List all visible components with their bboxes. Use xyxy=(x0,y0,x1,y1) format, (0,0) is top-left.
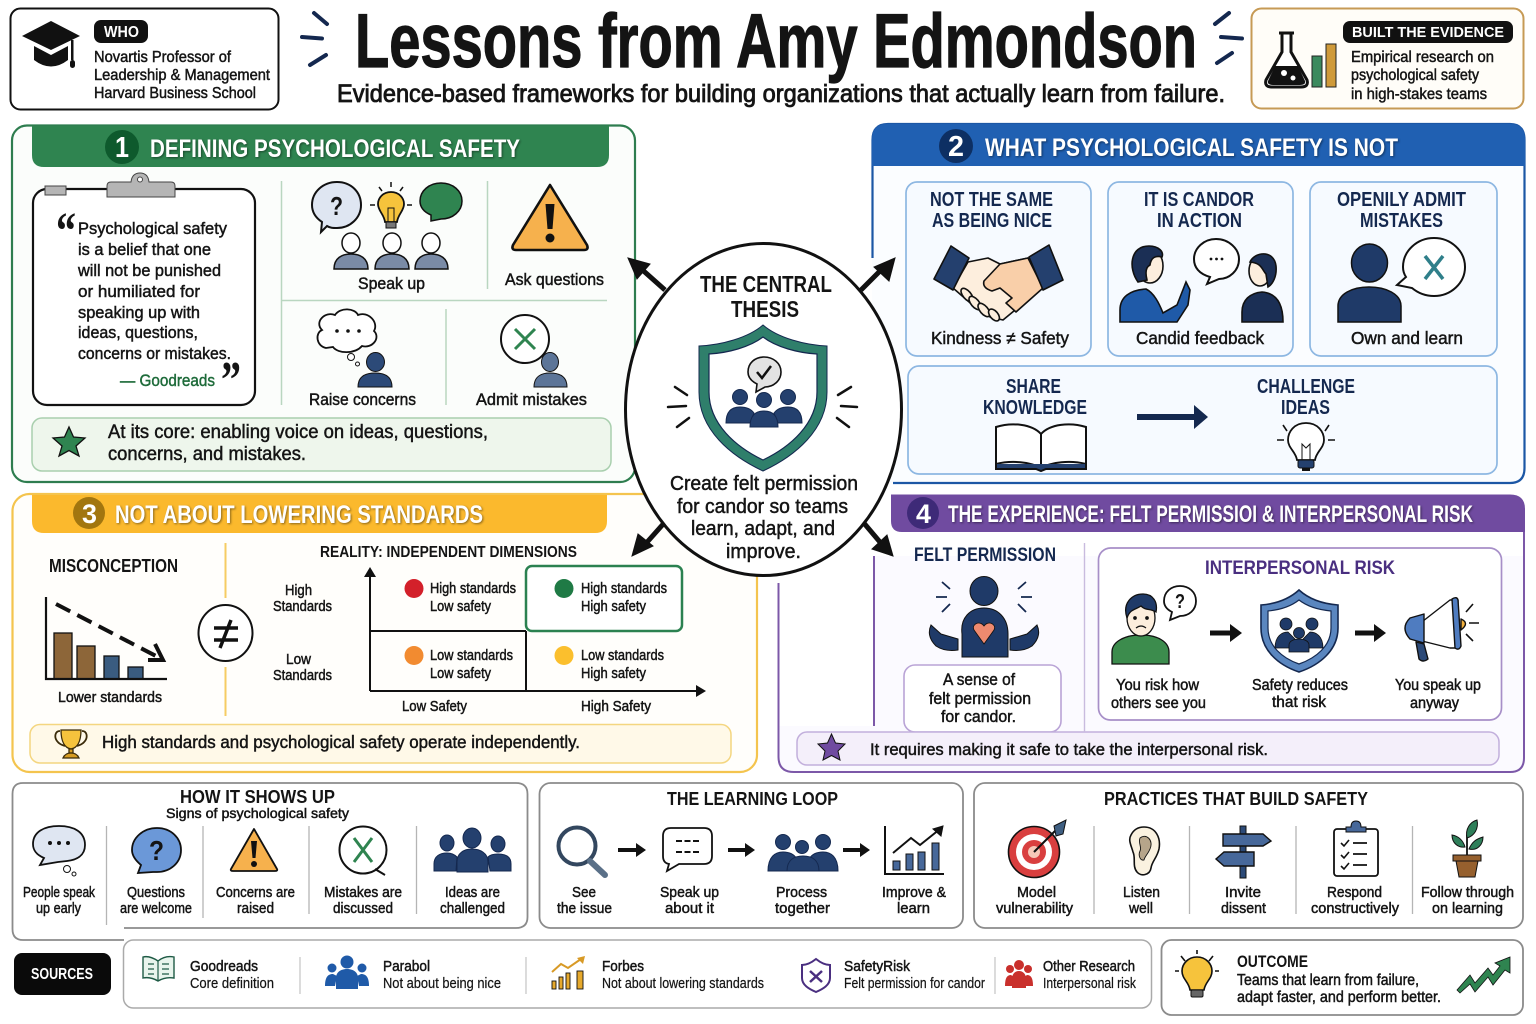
source: goodreads xyxy=(143,957,274,992)
item: model vulnerability: Model xyxy=(1017,884,1056,901)
quote clipboard xyxy=(33,173,255,409)
badge: who xyxy=(94,20,148,43)
item: respond constructively: Respond xyxy=(1327,884,1382,901)
panel 4: the experience xyxy=(778,494,1525,772)
arrow: to panel 3 xyxy=(632,522,665,556)
reality matrix: High safety xyxy=(581,598,646,615)
icon: ask questions xyxy=(505,185,604,289)
central thesis circle: improve. xyxy=(726,541,801,563)
panel: who xyxy=(10,8,278,110)
quote clipboard: speaking up with xyxy=(78,303,200,322)
source: goodreads: Core definition xyxy=(190,976,274,992)
item: mistakes are discussed: Mistakes are xyxy=(324,884,402,901)
interpersonal risk box: anyway xyxy=(1410,695,1459,712)
item: ideas are challenged: Ideas are xyxy=(445,884,500,901)
interpersonal risk box: others see you xyxy=(1111,695,1206,712)
card: it is candor in action: IN ACTION xyxy=(1157,210,1242,232)
item: ideas are challenged xyxy=(434,828,511,917)
card: not the same as being nice: NOT THE SAME xyxy=(930,189,1053,211)
step: improve and learn: learn xyxy=(897,900,930,917)
reality matrix: High Safety xyxy=(581,698,651,715)
item: model vulnerability xyxy=(996,820,1073,917)
step: process together: Process xyxy=(776,884,827,901)
card: not the same as being nice xyxy=(906,182,1091,356)
reality matrix: Low Safety xyxy=(402,698,467,715)
callout: it requires: It requires making it safe to take the interpersonal risk. xyxy=(870,740,1268,759)
box: a sense of felt permission xyxy=(904,665,1061,732)
source: parabol: Not about being nice xyxy=(383,976,501,992)
reality matrix: High xyxy=(285,582,312,599)
item: model vulnerability: vulnerability xyxy=(996,900,1073,917)
panel 1: defining psychological safety xyxy=(12,126,635,482)
icon: admit mistakes xyxy=(476,315,587,409)
item: concerns are raised: Concerns are xyxy=(216,884,295,901)
panel: practices that build safety xyxy=(974,783,1523,928)
item: questions are welcome: are welcome xyxy=(120,900,192,917)
icon: raise concerns xyxy=(309,309,416,409)
icon: graduation cap xyxy=(22,21,80,68)
box: a sense of felt permission: felt permission xyxy=(929,690,1031,708)
subtitle: Evidence-based frameworks for building organizations that actually learn from failure. xyxy=(337,80,1225,108)
not equal sign xyxy=(198,605,252,661)
arrow xyxy=(728,843,755,857)
heading: how it shows up: Signs of psychological safety xyxy=(166,805,349,821)
central thesis circle: THE CENTRAL xyxy=(700,271,832,297)
icon: speak up xyxy=(312,182,462,293)
icon: person with heart xyxy=(929,576,1039,657)
title: Lessons from Amy Edmondson xyxy=(355,0,1197,84)
icon: megaphone xyxy=(1405,598,1479,661)
item: concerns are raised xyxy=(216,829,295,917)
icon: handshake xyxy=(934,245,1063,323)
item: people speak up early xyxy=(23,826,95,917)
heading 2: WHAT PSYCHOLOGICAL SAFETY IS NOT xyxy=(985,134,1398,162)
heading 4 xyxy=(891,494,1525,532)
panel: outcome: Teams that learn from failure, xyxy=(1237,972,1419,989)
quote clipboard: ideas, questions, xyxy=(78,323,198,342)
central thesis circle xyxy=(626,244,902,576)
item: questions are welcome: ? xyxy=(149,835,164,866)
interpersonal risk box: You risk how xyxy=(1116,677,1200,694)
item: listen well xyxy=(1123,827,1160,917)
icon: admit mistakes: Admit mistakes xyxy=(476,390,587,409)
text: evidence details xyxy=(1351,49,1494,103)
source: other research xyxy=(1005,958,1137,992)
card: not the same as being nice: Kindness ≠ Safety xyxy=(931,328,1069,348)
panel: built the evidence xyxy=(1252,8,1524,108)
misconception chart xyxy=(46,556,178,706)
callout: high standards: High standards and psychological safety operate independently. xyxy=(102,732,580,752)
reality matrix xyxy=(273,544,706,715)
felt permission column: FELT PERMISSION xyxy=(914,545,1056,566)
item: people speak up early: up early xyxy=(36,900,81,917)
item: follow through on learning: Follow through xyxy=(1421,884,1514,901)
panel: outcome xyxy=(1162,940,1523,1015)
card: it is candor in action: Candid feedback xyxy=(1136,328,1264,348)
panel: outcome: OUTCOME xyxy=(1237,953,1308,971)
quote clipboard: ” xyxy=(221,352,241,409)
heading 1: DEFINING PSYCHOLOGICAL SAFETY xyxy=(150,135,520,163)
icon: light bulb xyxy=(1277,423,1335,471)
card: openily admit mistakes xyxy=(1310,182,1497,356)
badge: sources xyxy=(14,953,111,995)
interpersonal risk box: INTERPERSONAL RISK xyxy=(1205,557,1395,579)
panel: outcome: adapt faster, and perform better. xyxy=(1237,989,1441,1006)
card: openily admit mistakes: OPENILY ADMIT xyxy=(1337,189,1466,211)
heading 3 xyxy=(32,495,607,533)
source: parabol xyxy=(325,956,501,992)
misconception chart: MISCONCEPTION xyxy=(49,556,178,576)
source: safetyrisk: SafetyRisk xyxy=(844,958,910,975)
icon: person with x bubble xyxy=(1338,238,1465,322)
callout: it requires xyxy=(797,732,1499,765)
card: it is candor in action: IT IS CANDOR xyxy=(1144,189,1254,211)
step: process together: together xyxy=(775,900,830,917)
quote clipboard: Psychological safety xyxy=(78,219,227,238)
central thesis circle: learn, adapt, and xyxy=(691,518,835,540)
box: a sense of felt permission: A sense of xyxy=(943,671,1015,689)
icon: open book xyxy=(996,424,1086,471)
callout: at its core xyxy=(32,418,611,471)
card: share knowledge challenge ideas: SHARE xyxy=(1006,376,1061,398)
reality matrix: Low standards xyxy=(430,647,513,664)
callout: at its core: At its core: enabling voice on ideas, questions, xyxy=(108,421,488,443)
text: who details xyxy=(94,49,271,102)
decorative burst right xyxy=(1215,13,1242,63)
text: evidence details: in high-stakes teams xyxy=(1351,86,1487,103)
source: goodreads: Goodreads xyxy=(190,958,258,975)
item: respond constructively xyxy=(1311,821,1399,917)
central thesis circle: THESIS xyxy=(731,296,799,322)
step: speak up about it xyxy=(660,828,719,917)
interpersonal risk box: You speak up xyxy=(1395,677,1481,694)
source: forbes xyxy=(552,956,764,992)
reality matrix: High safety xyxy=(581,665,646,682)
icon: trophy xyxy=(55,730,87,758)
text: who details: Leadership & Management xyxy=(94,67,271,84)
item: questions are welcome xyxy=(120,828,192,917)
quote clipboard: will not be punished xyxy=(77,261,221,280)
heading 2: 2 xyxy=(948,131,964,163)
source: safetyrisk: Felt permission for candor xyxy=(844,976,985,992)
icon: ask questions: Ask questions xyxy=(505,270,604,289)
item: respond constructively: constructively xyxy=(1311,900,1399,917)
item: invite dissent: dissent xyxy=(1221,900,1267,917)
item: concerns are raised: raised xyxy=(237,900,274,917)
decorative burst left xyxy=(302,13,327,65)
item: invite dissent xyxy=(1216,826,1271,917)
panel: how it shows up xyxy=(12,783,528,940)
interpersonal risk box xyxy=(1098,548,1502,720)
card: openily admit mistakes: Own and learn xyxy=(1351,328,1463,348)
heading 2 xyxy=(872,124,1525,166)
step: see the issue: the issue xyxy=(557,900,612,917)
arrow xyxy=(843,843,870,857)
item: invite dissent: Invite xyxy=(1225,884,1261,901)
item: people speak up early: People speak xyxy=(23,884,95,901)
source: forbes: Not about lowering standards xyxy=(602,976,764,992)
icon: raise concerns: Raise concerns xyxy=(309,390,416,409)
misconception chart: Lower standards xyxy=(58,689,162,706)
reality matrix: Standards xyxy=(273,598,332,615)
card: share knowledge challenge ideas: IDEAS xyxy=(1281,397,1330,419)
step: see the issue: See xyxy=(572,884,596,901)
item: ideas are challenged: challenged xyxy=(440,900,505,917)
source: forbes: Forbes xyxy=(602,958,644,975)
arrow: safety to speaking xyxy=(1355,624,1386,642)
icon: rising arrow xyxy=(1457,957,1510,993)
reality matrix: High standards xyxy=(581,580,667,597)
heading 4: 4 xyxy=(916,499,931,529)
badge: sources: SOURCES xyxy=(31,966,93,983)
source: other research: Other Research xyxy=(1043,958,1135,975)
interpersonal risk box: that risk xyxy=(1272,694,1326,711)
box: a sense of felt permission: for candor. xyxy=(941,708,1016,726)
arrow: to panel 2 xyxy=(861,258,895,290)
quote clipboard: — Goodreads xyxy=(120,371,215,390)
reality matrix: REALITY: INDEPENDENT DIMENSIONS xyxy=(320,544,577,561)
reality matrix: High standards xyxy=(430,580,516,597)
decorative rays xyxy=(668,387,857,427)
step: speak up about it: about it xyxy=(665,900,715,917)
reality matrix: Low safety xyxy=(430,665,491,682)
reality matrix: Low safety xyxy=(430,598,491,615)
card: share knowledge challenge ideas: CHALLENGE xyxy=(1257,376,1355,398)
icon: blue shield xyxy=(1261,590,1338,672)
item: mistakes are discussed: discussed xyxy=(333,900,393,917)
step: improve and learn xyxy=(882,826,946,917)
card: not the same as being nice: AS BEING NICE xyxy=(932,210,1052,232)
card: share knowledge challenge ideas xyxy=(908,366,1497,474)
item: mistakes are discussed xyxy=(324,826,402,917)
quote clipboard: is a belief that one xyxy=(78,240,211,259)
step: see the issue xyxy=(557,828,612,917)
item: follow through on learning xyxy=(1421,820,1514,917)
badge: built the evidence: BUILT THE EVIDENCE xyxy=(1352,24,1504,41)
icon: worried person xyxy=(1112,586,1196,664)
icon: two people talking xyxy=(1120,239,1283,322)
source: safetyrisk xyxy=(802,958,985,992)
text: evidence details: psychological safety xyxy=(1351,67,1479,84)
heading 3: 3 xyxy=(82,499,97,529)
reality matrix: Low xyxy=(286,651,311,668)
item: questions are welcome: Questions xyxy=(127,884,185,901)
callout: at its core: concerns, and mistakes. xyxy=(108,443,306,465)
panel 3: not about lowering standards xyxy=(12,494,757,772)
heading: how it shows up: HOW IT SHOWS UP xyxy=(180,787,335,807)
step: improve and learn: Improve & xyxy=(882,884,946,901)
item: listen well: well xyxy=(1128,900,1153,917)
text: who details: Novartis Professor of xyxy=(94,49,232,66)
heading 1: 1 xyxy=(115,132,129,164)
heading 3: NOT ABOUT LOWERING STANDARDS xyxy=(115,501,483,529)
arrow: to panel 4 xyxy=(863,522,893,556)
arrow: share to challenge xyxy=(1137,405,1208,429)
arrow: risk to safety xyxy=(1210,624,1242,642)
panel: the learning loop xyxy=(540,783,963,928)
item: follow through on learning: on learning xyxy=(1432,900,1503,917)
callout: high standards xyxy=(30,724,731,763)
quote clipboard: concerns or mistakes. xyxy=(78,344,231,363)
item: listen well: Listen xyxy=(1123,884,1160,901)
heading 1 xyxy=(32,126,609,167)
card: it is candor in action xyxy=(1108,182,1293,356)
arrow xyxy=(618,843,646,857)
reality matrix: Standards xyxy=(273,667,332,684)
reality matrix: Low standards xyxy=(581,647,664,664)
quote clipboard: “ xyxy=(56,203,76,260)
felt permission column xyxy=(904,545,1061,732)
source: parabol: Parabol xyxy=(383,958,430,975)
panel: the learning loop: THE LEARNING LOOP xyxy=(667,789,838,809)
interpersonal risk box: Safety reduces xyxy=(1252,677,1348,694)
quote clipboard: or humiliated for xyxy=(78,282,200,301)
icon: flask and bars xyxy=(1266,33,1336,87)
step: process together xyxy=(768,834,838,917)
heading: how it shows up xyxy=(166,787,349,821)
icon: shield with team xyxy=(699,325,827,471)
central thesis circle: for candor so teams xyxy=(677,496,848,518)
source: other research: Interpersonal risk xyxy=(1043,976,1137,992)
card: openily admit mistakes: MISTAKES xyxy=(1360,210,1443,232)
panel: sources xyxy=(124,940,1152,1008)
arrow: to panel 1 xyxy=(628,258,665,290)
central thesis circle: Create felt permission xyxy=(670,473,858,495)
badge: who: WHO xyxy=(104,24,139,41)
interpersonal risk box: ? xyxy=(1175,591,1185,613)
icon: speak up: Speak up xyxy=(358,274,425,293)
panel: practices that build safety: PRACTICES THAT BUILD SAFETY xyxy=(1104,789,1368,809)
icon: outcome bulb xyxy=(1175,950,1219,997)
icon: speak up: ? xyxy=(330,191,343,221)
text: evidence details: Empirical research on xyxy=(1351,49,1494,66)
step: speak up about it: Speak up xyxy=(660,884,719,901)
card: share knowledge challenge ideas: KNOWLEDGE xyxy=(983,397,1087,419)
text: who details: Harvard Business School xyxy=(94,85,256,102)
